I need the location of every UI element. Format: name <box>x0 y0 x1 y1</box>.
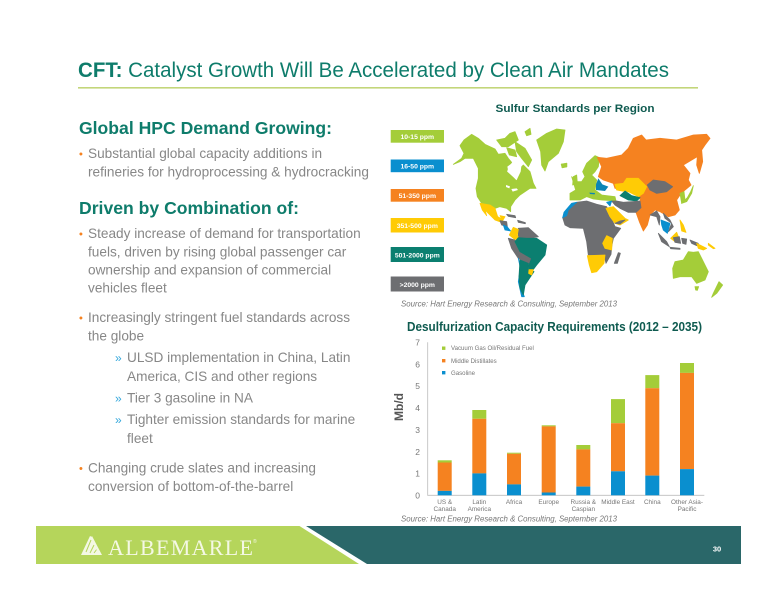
text block: fuel standards: » <box>115 392 122 406</box>
heading: desulfurization chart: Desulfurization Capacity Requirements (2012 – 2035) <box>407 320 702 334</box>
page number: 30 <box>713 544 721 554</box>
text block: crude slates: conversion of bottom-of-the-barrel <box>88 479 293 494</box>
oceania <box>673 252 723 297</box>
europe <box>570 156 616 201</box>
africa <box>563 201 621 273</box>
mexico <box>480 203 505 222</box>
russia, china and india <box>597 134 710 231</box>
y axis: 5 <box>415 381 420 391</box>
text block: demand: vehicles fleet <box>88 280 167 296</box>
legend: fuel type: Middle Distillates <box>451 358 497 365</box>
title: CFT: Catalyst Growth Will Be Accelerated by Clean Air Mandates <box>78 59 669 82</box>
legend: sulfur ppm: 16-50 ppm <box>400 164 434 170</box>
legend: sulfur ppm: 501-2000 ppm <box>395 252 440 260</box>
panel: left text <box>79 118 369 494</box>
heading: driven by: Driven by Combination of: <box>79 198 299 218</box>
north america <box>453 128 565 231</box>
text block: fuel standards: fleet <box>127 431 153 446</box>
text block: fuel standards <box>79 310 355 446</box>
x axis labels: Middle East <box>601 499 635 506</box>
bar chart <box>392 338 704 513</box>
bars: Russia and Caspian <box>576 445 590 495</box>
text block: fuel standards: ULSD implementation in China, Latin <box>127 350 350 365</box>
bars: China <box>645 375 659 495</box>
text block: capacity additions: refineries for hydroprocessing & hydrocracking <box>88 164 369 180</box>
x axis labels: Caspian <box>572 506 595 513</box>
x axis labels: America <box>468 506 491 513</box>
text block: demand: Steady increase of demand for transportation <box>88 226 361 241</box>
x axis labels: Africa <box>506 499 523 506</box>
legend: fuel type <box>442 345 534 377</box>
x axis labels: Canada <box>434 506 456 513</box>
text block: crude slates <box>79 460 316 494</box>
legend: sulfur ppm <box>391 130 444 292</box>
y axis: Mb/d <box>392 393 406 421</box>
bars: Middle East <box>611 399 625 495</box>
x axis labels: Russia & <box>571 499 597 506</box>
y axis: 2 <box>415 447 420 457</box>
text block: capacity additions <box>79 146 369 180</box>
y axis: 0 <box>415 490 420 500</box>
heading: global demand: Global HPC Demand Growing: <box>79 118 332 138</box>
x axis labels: China <box>644 499 661 506</box>
footer band <box>36 526 741 564</box>
x axis labels <box>434 499 703 513</box>
eurasia <box>570 134 710 233</box>
x axis labels: Pacific <box>678 506 697 513</box>
logo: Albemarle: ® <box>253 538 257 545</box>
text block: fuel standards: Tighter emission standards for marine <box>127 412 355 427</box>
y axis <box>392 338 704 500</box>
bars: US and Canada <box>438 460 452 495</box>
text block: fuel standards: Tier 3 gasoline in NA <box>127 390 254 406</box>
bars: Africa <box>507 453 521 495</box>
greenland <box>537 129 565 171</box>
indonesia and new guinea <box>658 232 715 250</box>
legend: fuel type: Vacuum Gas Oil/Residual Fuel <box>451 345 534 352</box>
y axis: 3 <box>415 425 420 435</box>
text block: fuel standards: America, CIS and other regions <box>127 369 317 384</box>
bars: Europe <box>542 425 556 495</box>
bars: Other Asia-Pacific <box>680 363 694 495</box>
text block: crude slates: Changing crude slates and increasing <box>88 460 316 476</box>
south america <box>508 227 547 297</box>
central america and caribbean <box>500 214 525 231</box>
source: map: Source: Hart Energy Research & Consulting, September 2013 <box>401 298 617 308</box>
legend: sulfur ppm: 10-15 ppm <box>400 134 434 141</box>
source: chart: Source: Hart Energy Research & Consulting, September 2013 <box>401 514 617 524</box>
legend: sulfur ppm: 51-350 ppm <box>399 193 436 200</box>
central and west asia <box>589 178 673 225</box>
world map <box>453 128 723 297</box>
iceland <box>561 163 567 168</box>
text block: demand: ownership and expansion of commercial <box>88 262 331 278</box>
southeast asia <box>650 211 686 233</box>
text block: capacity additions: Substantial global capacity additions in <box>88 146 322 161</box>
legend: sulfur ppm: 351-500 ppm <box>397 223 438 230</box>
japan and korea <box>680 186 693 203</box>
legend: sulfur ppm: >2000 ppm <box>400 282 435 289</box>
text block: fuel standards: the globe <box>88 328 144 344</box>
text block: fuel standards: » <box>115 351 122 365</box>
x axis labels: Other Asia- <box>671 499 703 506</box>
legend: fuel type: Gasoline <box>451 370 476 377</box>
x axis labels: Latin <box>472 499 487 506</box>
icon: logo mark <box>81 536 102 555</box>
text block: capacity additions: • <box>79 148 83 160</box>
y axis: 1 <box>415 469 420 479</box>
bars: Latin America <box>472 410 486 495</box>
logo: Albemarle: ALBEMARLE <box>108 535 253 560</box>
y axis: 7 <box>415 338 420 348</box>
text block: demand: • <box>79 228 83 240</box>
y axis: 4 <box>415 403 420 413</box>
text block: fuel standards: Increasingly stringent fuel standards across <box>88 310 350 325</box>
y axis: 6 <box>415 359 420 369</box>
x axis labels: US & <box>437 499 453 506</box>
text block: fuel standards: • <box>79 312 83 324</box>
x axis labels: Europe <box>538 499 559 506</box>
text block: fuel standards: » <box>115 413 122 427</box>
text block: crude slates: • <box>79 463 83 475</box>
heading: sulfur standards: Sulfur Standards per Region <box>496 103 655 115</box>
text block: demand: fuels, driven by rising global passenger car <box>88 244 347 260</box>
text block: demand <box>79 226 361 296</box>
